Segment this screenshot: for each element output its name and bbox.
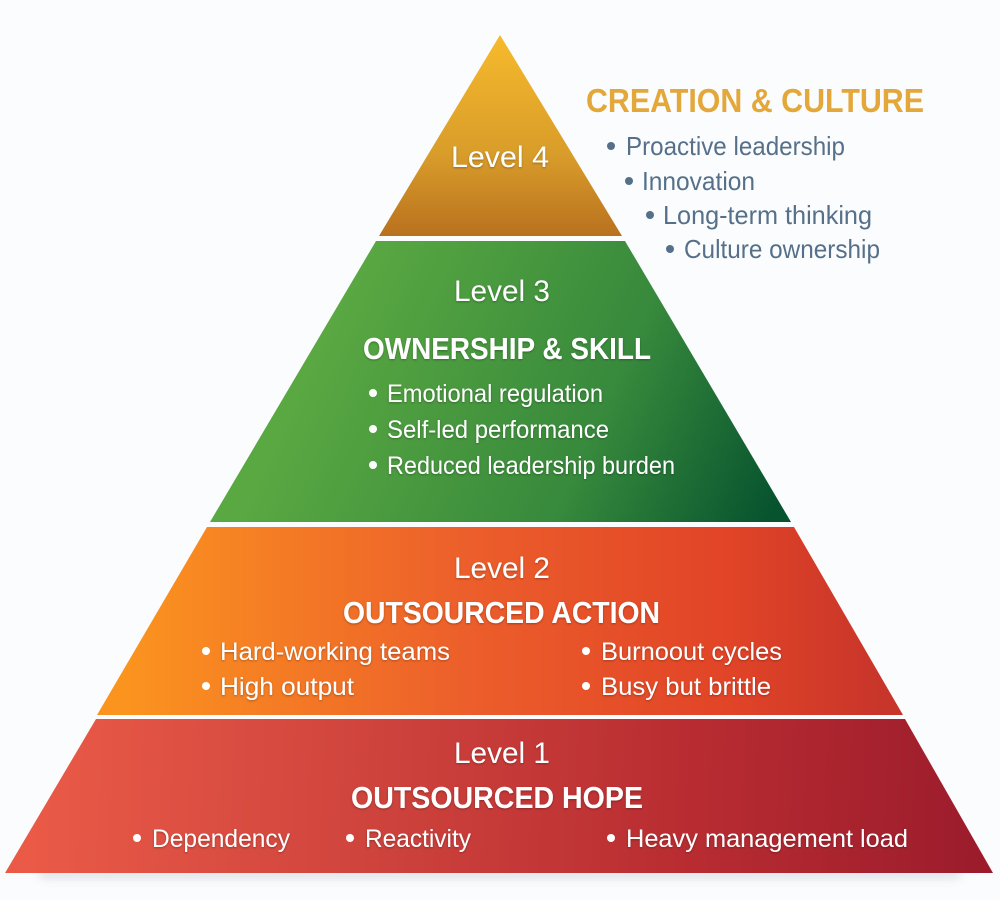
pyramid level 1 [5, 719, 993, 873]
level 2 list: Burnoout cycles [601, 638, 782, 666]
level 4 label: Level 4 [451, 141, 549, 174]
level 1 list: Reactivity [365, 825, 471, 853]
pyramid level 3 [210, 241, 791, 522]
level 2 list [202, 638, 782, 701]
ground shadow [40, 869, 960, 878]
callout: creation and culture [586, 82, 924, 264]
callout list: Proactive leadership [626, 131, 845, 161]
callout list [607, 131, 880, 264]
level 3 label: Level 3 [454, 275, 550, 308]
level 1 list: Dependency [152, 825, 290, 853]
level 2 list: Busy but brittle [601, 673, 771, 701]
level 2 list: Hard-working teams [220, 638, 450, 666]
level 1 list: Heavy management load [626, 825, 908, 853]
level 1 label: Level 1 [454, 737, 550, 770]
callout list: Long-term thinking [663, 200, 872, 230]
level 3 heading: OWNERSHIP & SKILL [363, 331, 651, 366]
level 2 heading: OUTSOURCED ACTION [343, 595, 660, 630]
callout list: Culture ownership [684, 234, 880, 264]
level 1 list [133, 825, 908, 853]
level 3 list [369, 380, 675, 480]
level 3 list: Emotional regulation [387, 380, 603, 408]
level 3 list: Reduced leadership burden [387, 452, 675, 480]
level 3 list: Self-led performance [387, 416, 609, 444]
callout heading: CREATION & CULTURE [586, 82, 924, 119]
level 2 list: High output [220, 673, 354, 701]
level 1 heading: OUTSOURCED HOPE [351, 780, 643, 815]
pyramid level 4 [379, 35, 622, 236]
pyramid level 2 [97, 527, 903, 715]
callout list: Innovation [642, 166, 755, 196]
level 2 label: Level 2 [454, 552, 550, 585]
